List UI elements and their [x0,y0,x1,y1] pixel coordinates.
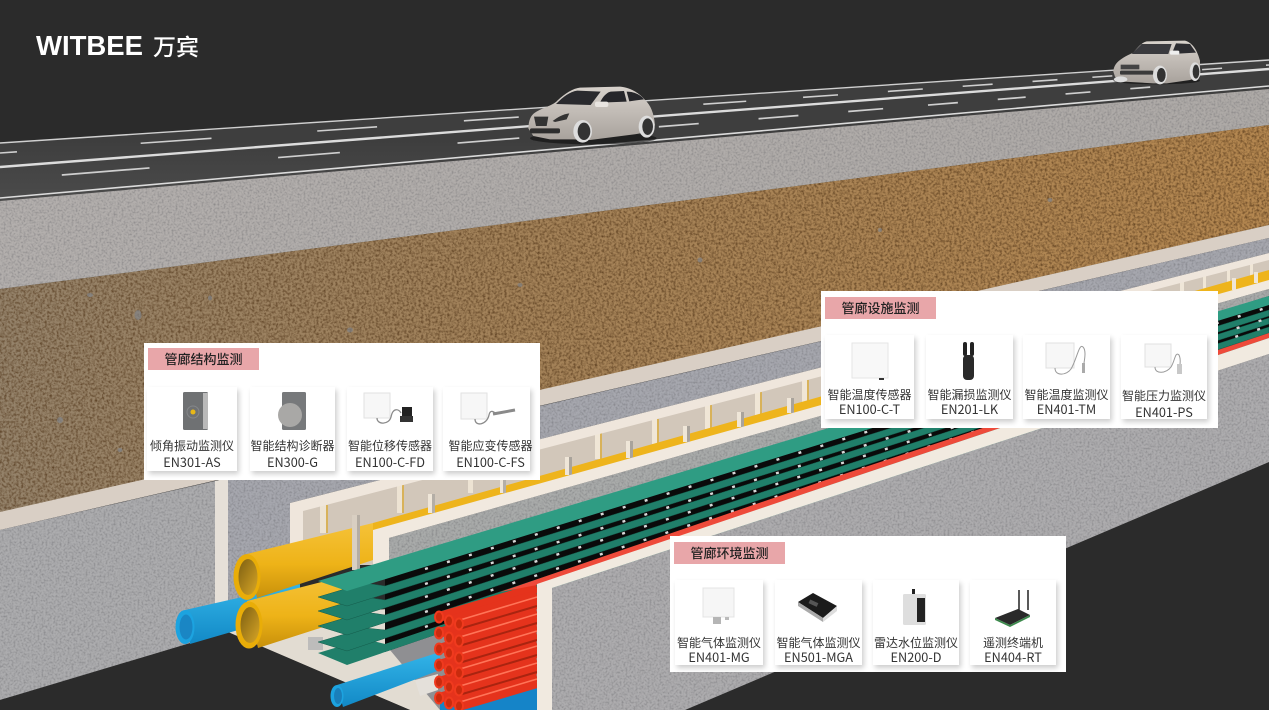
device card: EN300-G: EN300-G [267,452,318,471]
device card: EN100-C-FD: 智能位移传感器 [348,437,432,454]
road concrete slab [0,89,1269,289]
heading: structure monitoring [148,348,259,370]
device card: EN100-C-FD: EN100-C-FD [355,452,425,471]
back wall white cap [290,253,1269,548]
red conduit strip [500,333,1269,592]
front posts [428,272,1258,513]
heading: environment monitoring: 管廊环境监测 [690,543,768,562]
car rear distance [1113,41,1200,84]
tunnel top band [0,225,1269,530]
device card: EN301-AS [147,387,237,471]
device card: EN401-MG: 智能气体监测仪 [677,634,761,651]
device card: EN300-G: 智能结构诊断器 [250,437,334,454]
device card: EN301-AS: EN301-AS [163,452,221,471]
device card: EN300-G [250,387,335,471]
yellow pipe upper [234,523,373,600]
device card: EN100-C-FS: EN100-C-FS [456,452,525,471]
device card: EN501-MGA: EN501-MGA [784,647,853,666]
device card: EN404-RT [970,580,1056,665]
tunnel back wall [228,238,1269,640]
device card: EN401-PS: EN401-PS [1135,402,1193,421]
device card: EN200-D: EN200-D [891,647,941,666]
front wall [537,338,1269,710]
panel: structure monitoring [144,343,540,480]
tunnel floor [228,600,537,710]
dark ground corner [0,632,410,710]
red conduit bundle [435,588,537,710]
device card: EN100-C-T [825,335,914,419]
device card: EN100-C-FD [347,387,433,471]
device card: EN401-PS: 智能压力监测仪 [1122,387,1206,404]
device card: EN100-C-FS: 智能应变传感器 [448,437,532,454]
device card: EN100-C-T: EN100-C-T [839,399,900,418]
device card: EN404-RT: 遥测终端机 [983,634,1043,651]
device card: EN100-C-FS [443,387,530,471]
panel: environment monitoring [670,536,1066,672]
car front [528,87,657,144]
panel: facility monitoring [821,291,1218,428]
device card: EN401-PS [1121,335,1207,419]
device card: EN200-D [873,580,959,665]
device card: EN401-MG [675,580,763,665]
device card: EN301-AS: 倾角振动监测仪 [150,437,234,454]
device card: EN200-D: 雷达水位监测仪 [874,634,958,651]
tunnel left outer wall [0,478,228,700]
heading: facility monitoring [825,297,936,319]
device card: EN501-MGA: 智能气体监测仪 [776,634,860,651]
device card: EN100-C-T: 智能温度传感器 [827,386,912,403]
road surface [0,60,1269,201]
heading: structure monitoring: 管廊结构监测 [164,349,242,368]
device card: EN201-LK: EN201-LK [941,399,998,418]
back wall posts [320,263,1253,533]
heading: environment monitoring [674,542,785,564]
device card: EN401-TM [1023,335,1110,419]
inner beige wall [303,257,1269,565]
cable tray stack [318,296,1269,665]
device card: EN201-LK [926,335,1013,419]
device card: EN401-TM: EN401-TM [1037,399,1096,418]
blue pipe lower [330,652,537,710]
middle wall [373,280,1269,590]
logo: 万宾 [153,28,199,62]
device card: EN401-TM: 智能温度监测仪 [1024,386,1108,403]
device card: EN401-MG: EN401-MG [688,647,750,666]
logo: WITBEE [36,30,143,61]
foreground post [352,515,360,570]
device card: EN404-RT: EN404-RT [984,647,1042,666]
soil layer [0,125,1269,513]
yellow pipe lower [236,576,345,648]
yellow conduit along wall [373,270,1269,535]
heading: facility monitoring: 管廊设施监测 [841,298,920,317]
device card: EN201-LK: 智能漏损监测仪 [927,386,1012,403]
logo [36,28,199,62]
blue pipe upper [176,584,300,644]
device card: EN501-MGA [775,580,862,665]
